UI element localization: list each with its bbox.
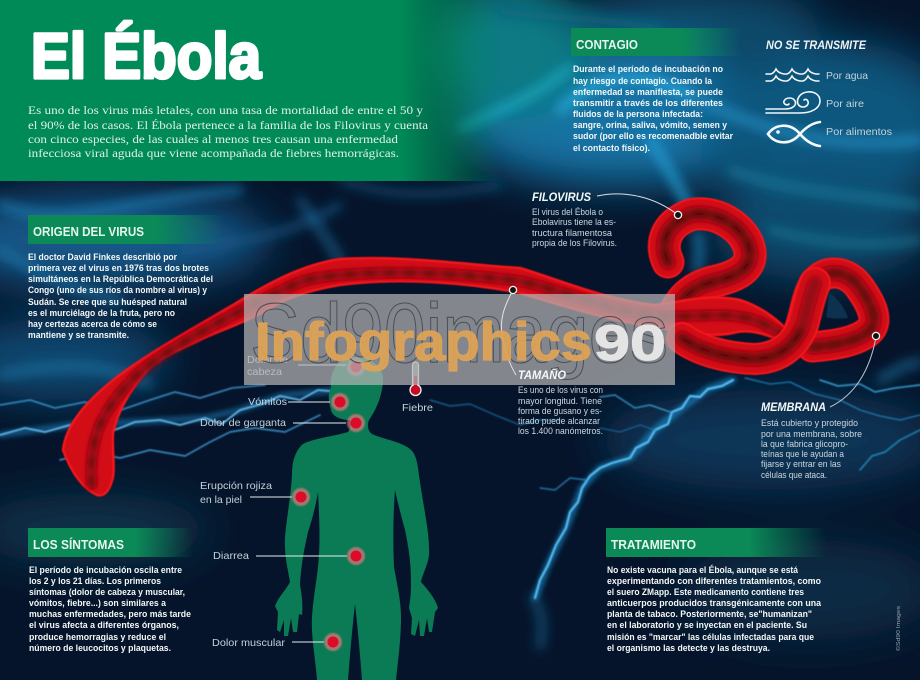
text: tratamiento: en el laboratorio y se inyectan en el paciente. Su bbox=[607, 620, 807, 631]
heading: los síntomas bbox=[28, 528, 193, 557]
heading: origen del virus bbox=[28, 215, 223, 244]
text: contagio: hay riesgo de contagio. Cuando la bbox=[573, 76, 713, 87]
label: fiebre: Fiebre bbox=[402, 402, 433, 414]
title: El Ébola bbox=[31, 20, 261, 92]
heading: no se transmite: NO SE TRANSMITE bbox=[766, 38, 867, 52]
symptom: dolor muscular: Dolor muscular bbox=[212, 637, 286, 649]
text: origen del virus: hay certezas acerca de cómo se bbox=[28, 319, 157, 330]
illustration: ebola virus filament bbox=[63, 214, 874, 495]
text: los síntomas: el virus afecta a diferentes órganos, bbox=[29, 620, 179, 631]
text: tamaño bbox=[518, 385, 603, 437]
symptom: dolor de cabeza: cabeza bbox=[247, 366, 282, 378]
symptom: vómitos: Vómitos bbox=[248, 396, 287, 408]
text: tamaño: Es uno de los virus con bbox=[518, 385, 603, 396]
symptom: dolor de cabeza: Dolor de bbox=[247, 354, 288, 366]
symptom: erupción rojiza en la piel: en la piel bbox=[200, 494, 242, 506]
text: membrana: la que fabrica glicopro- bbox=[761, 439, 848, 450]
glow under veins bbox=[0, 380, 733, 598]
text: membrana: por una membrana, sobre bbox=[761, 429, 862, 440]
callout: tamaño leader bbox=[501, 286, 517, 375]
panel: origen del virus bbox=[28, 215, 223, 341]
text: contagio: el contacto físico). bbox=[573, 143, 650, 154]
heading: filovirus: FILOVIRUS bbox=[532, 190, 591, 204]
text: tratamiento: el suero ZMapp. Este medicamento contiene tres bbox=[607, 587, 804, 598]
text: contagio: Durante el período de incubación no bbox=[573, 64, 723, 75]
text: tamaño: mayor longitud. Tiene bbox=[518, 396, 602, 407]
virus: inner loop gap bbox=[826, 293, 848, 319]
text: tamaño: forma de gusano y es- bbox=[518, 406, 602, 417]
text: tratamiento: misión es "marcar" las células infectadas para que bbox=[607, 632, 814, 643]
heading: tratamiento: TRATAMIENTO bbox=[611, 537, 696, 552]
label: por alimentos: Por alimentos bbox=[826, 126, 892, 138]
text: los síntomas: El período de incubación oscila entre bbox=[29, 565, 182, 576]
text: los síntomas: los 2 y los 21 días. Los primeros bbox=[29, 576, 161, 587]
text: membrana: Está cubierto y protegido bbox=[761, 418, 858, 429]
text: membrana: fijarse y entrar en las bbox=[761, 459, 841, 470]
heading: tratamiento bbox=[606, 528, 826, 557]
intro text: Es uno de los virus más letales, con una tasa de mortalidad de entre el 50 y bbox=[28, 103, 423, 117]
symptom: diarrea bbox=[213, 547, 365, 565]
label: por agua: Por agua bbox=[826, 70, 868, 82]
leader line and marker bbox=[830, 332, 880, 407]
intro text: con cinco especies, de las cuales al menos tres causan una enfermedad bbox=[28, 132, 398, 146]
text: contagio: fluidos de la persona infectada: bbox=[573, 109, 703, 120]
text: contagio: enfermedad se manifiesta, se puede bbox=[573, 87, 723, 98]
text: tratamiento: experimentando con diferentes tratamientos, como bbox=[607, 576, 821, 587]
intro text bbox=[28, 103, 429, 160]
text: contagio bbox=[573, 64, 733, 154]
text: tratamiento: No existe vacuna para el Ébola, aunque se está bbox=[607, 565, 799, 576]
symptom: vómitos bbox=[248, 393, 349, 411]
text: tratamiento: planta de tabaco. Posteriormente, se"humanizan" bbox=[607, 609, 812, 620]
intro text: infecciosa viral aguda que viene acompañada de fiebres hemorrágicas. bbox=[28, 146, 399, 160]
text: origen del virus: mantiene y se transmite. bbox=[28, 330, 129, 341]
symptom: dolor de garganta: Dolor de garganta bbox=[200, 417, 286, 429]
text: membrana bbox=[761, 418, 862, 481]
panel: los síntomas bbox=[28, 528, 193, 654]
text: origen del virus: Congo (uno de sus ríos da nombre al virus) y bbox=[28, 285, 208, 296]
text: origen del virus: es el murciélago de la fruta, pero no bbox=[28, 308, 175, 319]
panel: title and intro background bbox=[0, 0, 500, 181]
watermark: 90: 90 bbox=[594, 315, 666, 371]
text: contagio: sangre, orina, saliva, vómito, semen y bbox=[573, 120, 728, 131]
symptom: dolor de garganta bbox=[200, 414, 365, 432]
heading: membrana: MEMBRANA bbox=[761, 400, 826, 414]
virus: right loop bbox=[790, 273, 874, 347]
text: origen del virus: simultáneos en la República Democrática del bbox=[28, 274, 213, 285]
icon: water waves bbox=[766, 69, 819, 81]
credit: ©Sd90 Images bbox=[895, 606, 902, 651]
text: los síntomas: número de leucocitos y plaquetas. bbox=[29, 643, 171, 654]
heading: los síntomas: LOS SÍNTOMAS bbox=[33, 537, 124, 552]
virus: long body bbox=[63, 258, 800, 495]
text: origen del virus bbox=[28, 252, 213, 341]
text: tamaño: los 1.400 nanómetros. bbox=[518, 426, 603, 437]
text: origen del virus: El doctor David Finkes describió por bbox=[28, 252, 177, 263]
watermark banner bbox=[244, 286, 675, 385]
text: filovirus bbox=[532, 207, 617, 249]
label: por aire: Por aire bbox=[826, 98, 864, 110]
text: tratamiento: anticuerpos producidos transgénicamente con una bbox=[607, 598, 822, 609]
callout: membrana bbox=[761, 332, 880, 481]
callout: tamaño bbox=[518, 367, 603, 437]
text: tamaño: tirado puede alcanzar bbox=[518, 416, 600, 427]
text: los síntomas bbox=[29, 565, 191, 654]
watermark: outlined text: Sd90images bbox=[250, 286, 668, 380]
callout: filovirus bbox=[532, 190, 682, 249]
watermark: infographics: Infographics bbox=[255, 312, 592, 372]
symptom: dolor muscular bbox=[212, 633, 342, 651]
heading: origen del virus: ORIGEN DEL VIRUS bbox=[33, 224, 144, 239]
virus: lower loop bbox=[682, 283, 815, 359]
text: membrana: teínas que le ayudan a bbox=[761, 449, 845, 460]
text: los síntomas: síntomas (dolor de cabeza y muscular, bbox=[29, 587, 185, 598]
text: los síntomas: produce hemorragias y reduce el bbox=[29, 632, 166, 643]
text: origen del virus: primera vez el virus en 1976 tras dos brotes bbox=[28, 263, 209, 274]
text: tratamiento bbox=[607, 565, 822, 654]
icon: thermometer bbox=[410, 362, 421, 396]
symptom: erupción rojiza en la piel: Erupción rojiza bbox=[200, 480, 272, 492]
intro text: el 90% de los casos. El Ébola pertenece a la familia de los Filovirus y cuenta bbox=[28, 118, 429, 132]
leader line and marker bbox=[597, 194, 682, 219]
figure: human body silhouette bbox=[275, 357, 438, 680]
text: contagio: transmitir a través de los diferentes bbox=[573, 98, 723, 109]
symptom: diarrea: Diarrea bbox=[213, 550, 249, 562]
icon: fish bbox=[768, 122, 820, 146]
virus: upper hook bbox=[664, 214, 750, 312]
panel: tratamiento bbox=[606, 528, 826, 654]
text: contagio: sudor (por ello es recomenadble evitar bbox=[573, 131, 733, 142]
icon: air swirl bbox=[766, 92, 820, 113]
text: membrana: células que ataca. bbox=[761, 470, 827, 481]
heading: contagio bbox=[571, 28, 741, 56]
text: los síntomas: vómitos, fiebre...) son similares a bbox=[29, 598, 167, 609]
text: filovirus: El virus del Ébola o bbox=[532, 207, 603, 218]
text: tratamiento: el organismo las detecte y las destruya. bbox=[607, 643, 770, 654]
symptom: erupción rojiza en la piel bbox=[200, 480, 310, 506]
heading: tamaño: TAMAÑO bbox=[518, 367, 567, 382]
text: filovirus: tructura filamentosa bbox=[532, 228, 613, 239]
text: filovirus: propia de los Filovirus. bbox=[532, 238, 617, 249]
text: filovirus: Ebolavirus tiene la es- bbox=[532, 217, 616, 228]
symptom: dolor de cabeza bbox=[247, 354, 365, 378]
panel: no se transmite bbox=[766, 38, 892, 146]
text: origen del virus: Sudán. Se cree que su huésped natural bbox=[28, 297, 187, 308]
text: los síntomas: muchas enfermedades, pero más tarde bbox=[29, 609, 191, 620]
panel: contagio bbox=[571, 28, 741, 154]
heading: contagio: CONTAGIO bbox=[576, 37, 638, 52]
